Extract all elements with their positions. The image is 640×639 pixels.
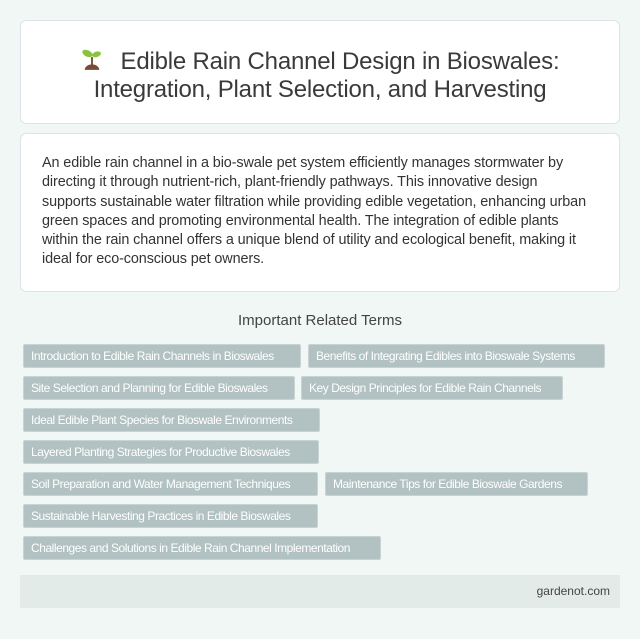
description card xyxy=(20,133,620,292)
tags: Key Design Principles for Edible Rain Channels xyxy=(309,381,541,395)
description text: ideal for eco-conscious pet owners. xyxy=(42,251,264,267)
tags: Soil Preparation and Water Management Techniques xyxy=(31,477,290,491)
footer text: source: gardenot.com xyxy=(537,584,610,598)
header card xyxy=(20,20,620,124)
description text: directing it through nutrient-rich, plant-friendly pathways. This innovative design xyxy=(42,174,537,190)
description text: supports sustainable water filtration while providing edible vegetation, enhancing urban xyxy=(42,194,586,210)
description text: An edible rain channel in a bio-swale pet system efficiently manages stormwater by xyxy=(42,155,563,171)
heading: related terms: Important Related Terms xyxy=(238,312,402,329)
tags: Challenges and Solutions in Edible Rain Channel Implementation xyxy=(31,541,350,555)
description text xyxy=(42,155,586,267)
title: Edible Rain Channel Design in Bioswales: xyxy=(121,48,559,75)
title xyxy=(82,48,559,103)
tags: Sustainable Harvesting Practices in Edible Bioswales xyxy=(31,509,290,523)
description text: green spaces and promoting environmental health. The integration of edible plants xyxy=(42,213,558,229)
tags: Maintenance Tips for Edible Bioswale Gardens xyxy=(333,477,562,491)
tags: Benefits of Integrating Edibles into Bioswale Systems xyxy=(316,349,575,363)
footer xyxy=(20,575,620,608)
tags: Layered Planting Strategies for Productive Bioswales xyxy=(31,445,290,459)
description text: within the rain channel offers a unique blend of utility and ecological benefit, making it xyxy=(42,232,576,248)
icon: seedling xyxy=(82,50,101,70)
tags: Ideal Edible Plant Species for Bioswale Environments xyxy=(31,413,292,427)
tags: Site Selection and Planning for Edible Bioswales xyxy=(31,381,268,395)
title: Integration, Plant Selection, and Harvesting xyxy=(94,76,546,103)
tags: Introduction to Edible Rain Channels in Bioswales xyxy=(31,349,274,363)
